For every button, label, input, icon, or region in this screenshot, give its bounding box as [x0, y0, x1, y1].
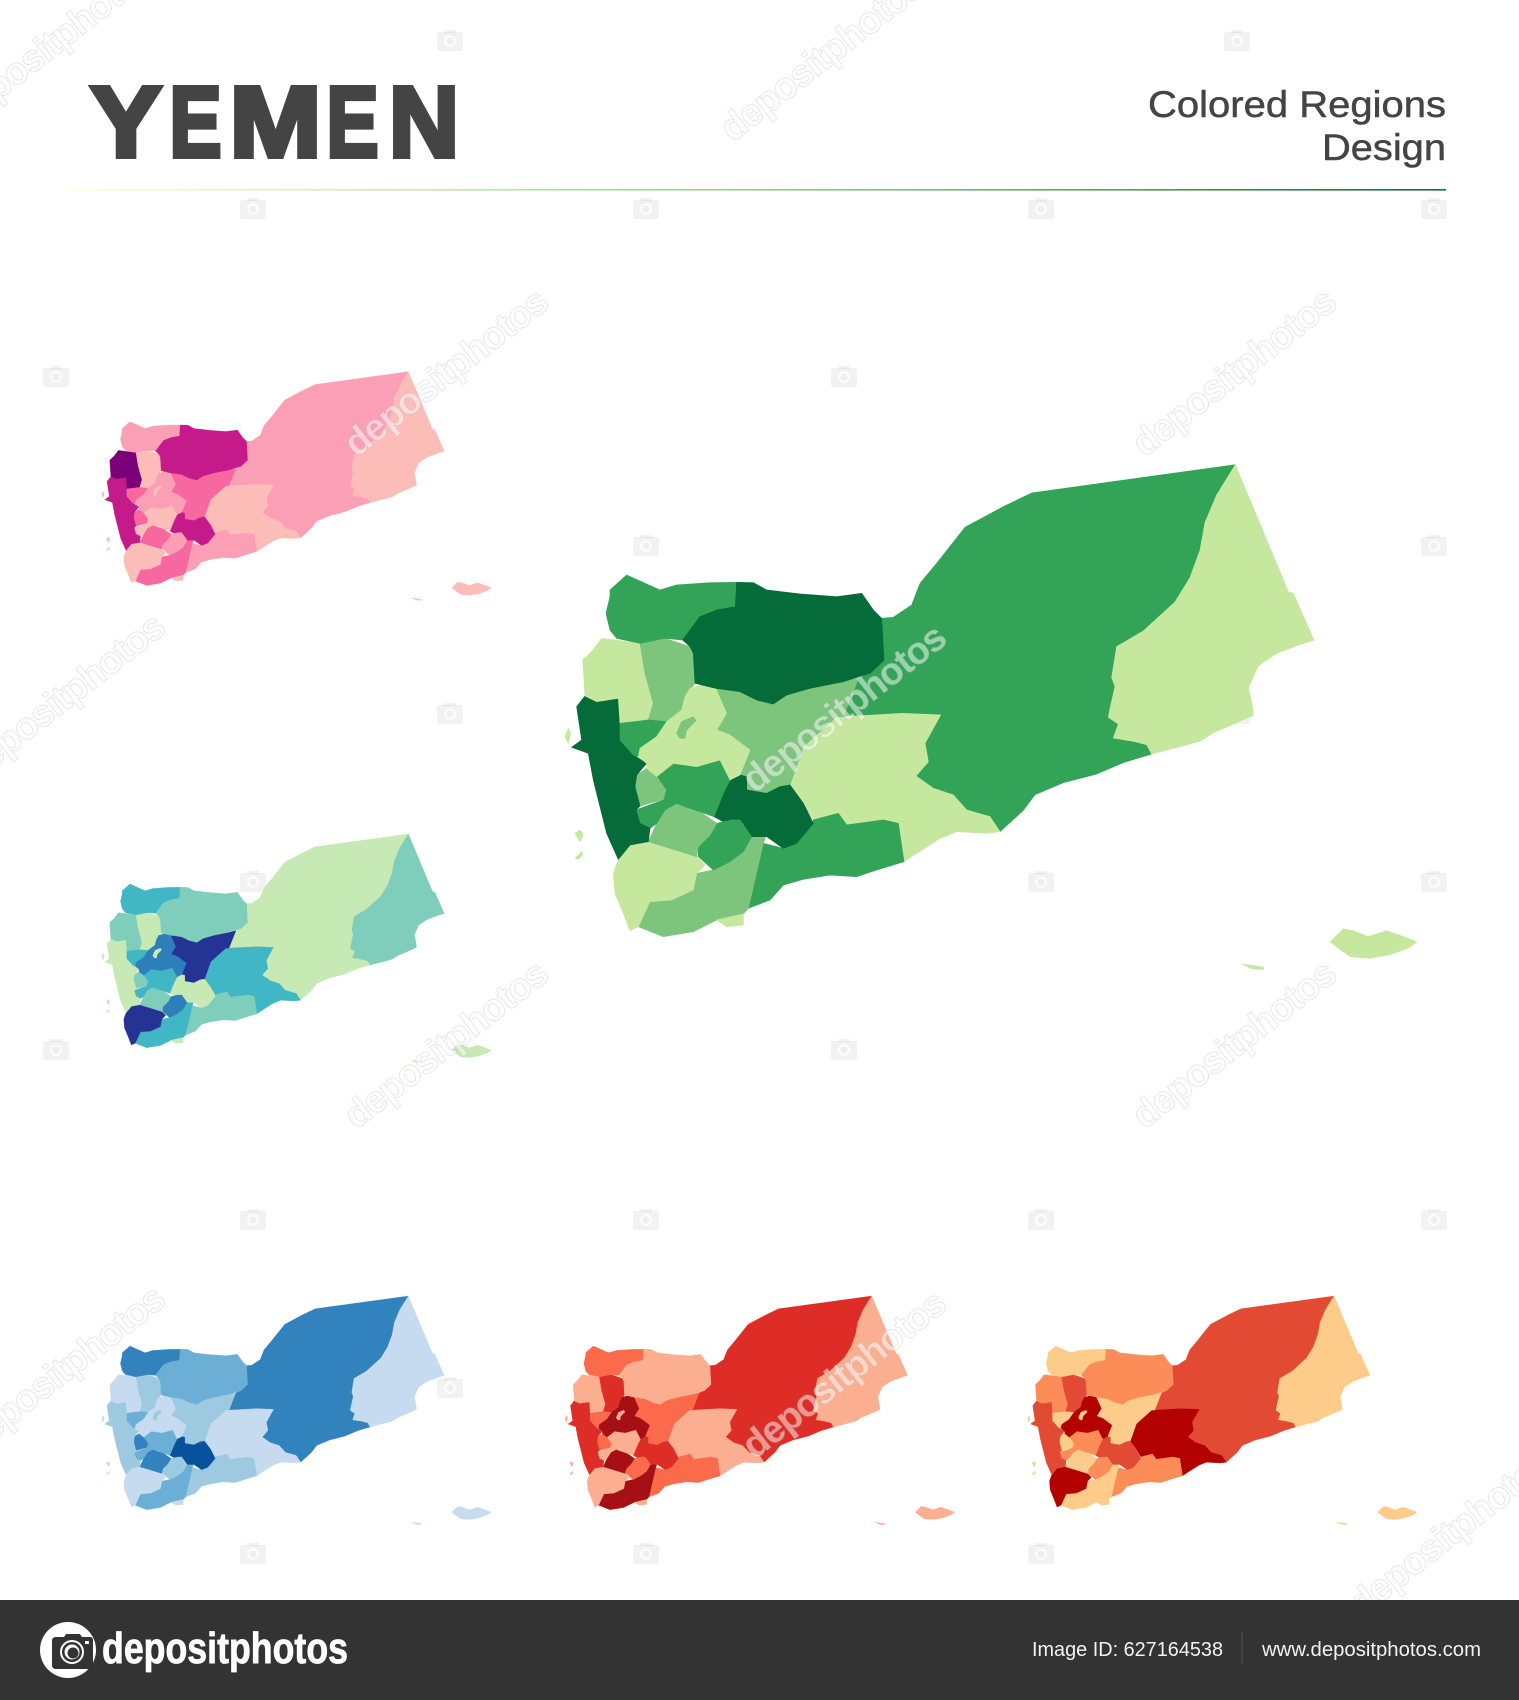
islands: Socotra — [1242, 929, 1417, 970]
title: Y — [90, 66, 162, 178]
subtitle: Design — [1322, 127, 1446, 168]
footer bar — [0, 1600, 1519, 1700]
region: Abyan — [748, 813, 904, 908]
map: orange — [1027, 1296, 1417, 1525]
region: Aden — [717, 914, 743, 927]
map: red — [565, 1296, 955, 1525]
title: M — [230, 66, 322, 178]
region: Al Jawf — [683, 582, 884, 704]
islands: Red Sea — [565, 728, 583, 859]
map: blue — [102, 1296, 491, 1525]
region: Shabwa — [790, 713, 1000, 862]
watermark text: depositphotos — [336, 280, 557, 465]
region: Taiz — [613, 842, 705, 931]
region: Hadramawt — [843, 465, 1235, 832]
region: Lahij — [638, 833, 767, 937]
region: Al Dhale — [698, 820, 752, 870]
region: Marib — [716, 678, 858, 793]
title — [90, 66, 459, 178]
website url: www.depositphotos.com — [1261, 1639, 1481, 1661]
region: Saada — [606, 575, 737, 643]
region: Sanaa city — [677, 717, 696, 738]
map: pink — [102, 372, 491, 600]
subtitle — [1148, 84, 1446, 168]
watermark text: depositphotos — [336, 952, 557, 1137]
image id: Image ID: 627164538 — [1032, 1639, 1223, 1661]
region: Sanaa — [638, 684, 750, 780]
title: N — [389, 66, 459, 178]
subtitle: Colored Regions — [1148, 84, 1446, 125]
icon: depositphotos camera logo — [40, 1622, 96, 1678]
region: Al Mahwit — [620, 720, 667, 757]
logo wordmark: depositphotos — [102, 1624, 348, 1673]
region: Amran — [640, 638, 695, 722]
region: Hajjah — [583, 638, 653, 723]
map: main green — [565, 465, 1417, 970]
region: Dhamar — [636, 760, 730, 828]
region: Al Bayda — [714, 775, 813, 848]
region: Ibb — [648, 803, 717, 857]
watermark text: depositphotos — [734, 616, 955, 801]
watermark text: depositphotos — [1124, 280, 1345, 465]
title: E — [170, 66, 222, 178]
region: Raymah — [635, 768, 666, 806]
watermark text: depositphotos — [734, 1282, 955, 1467]
title: E — [326, 66, 378, 178]
region: Mahra — [1108, 465, 1314, 754]
region: Hudaydah — [572, 696, 650, 859]
map: teal — [102, 834, 491, 1063]
watermark text: depositphotos — [1124, 952, 1345, 1137]
